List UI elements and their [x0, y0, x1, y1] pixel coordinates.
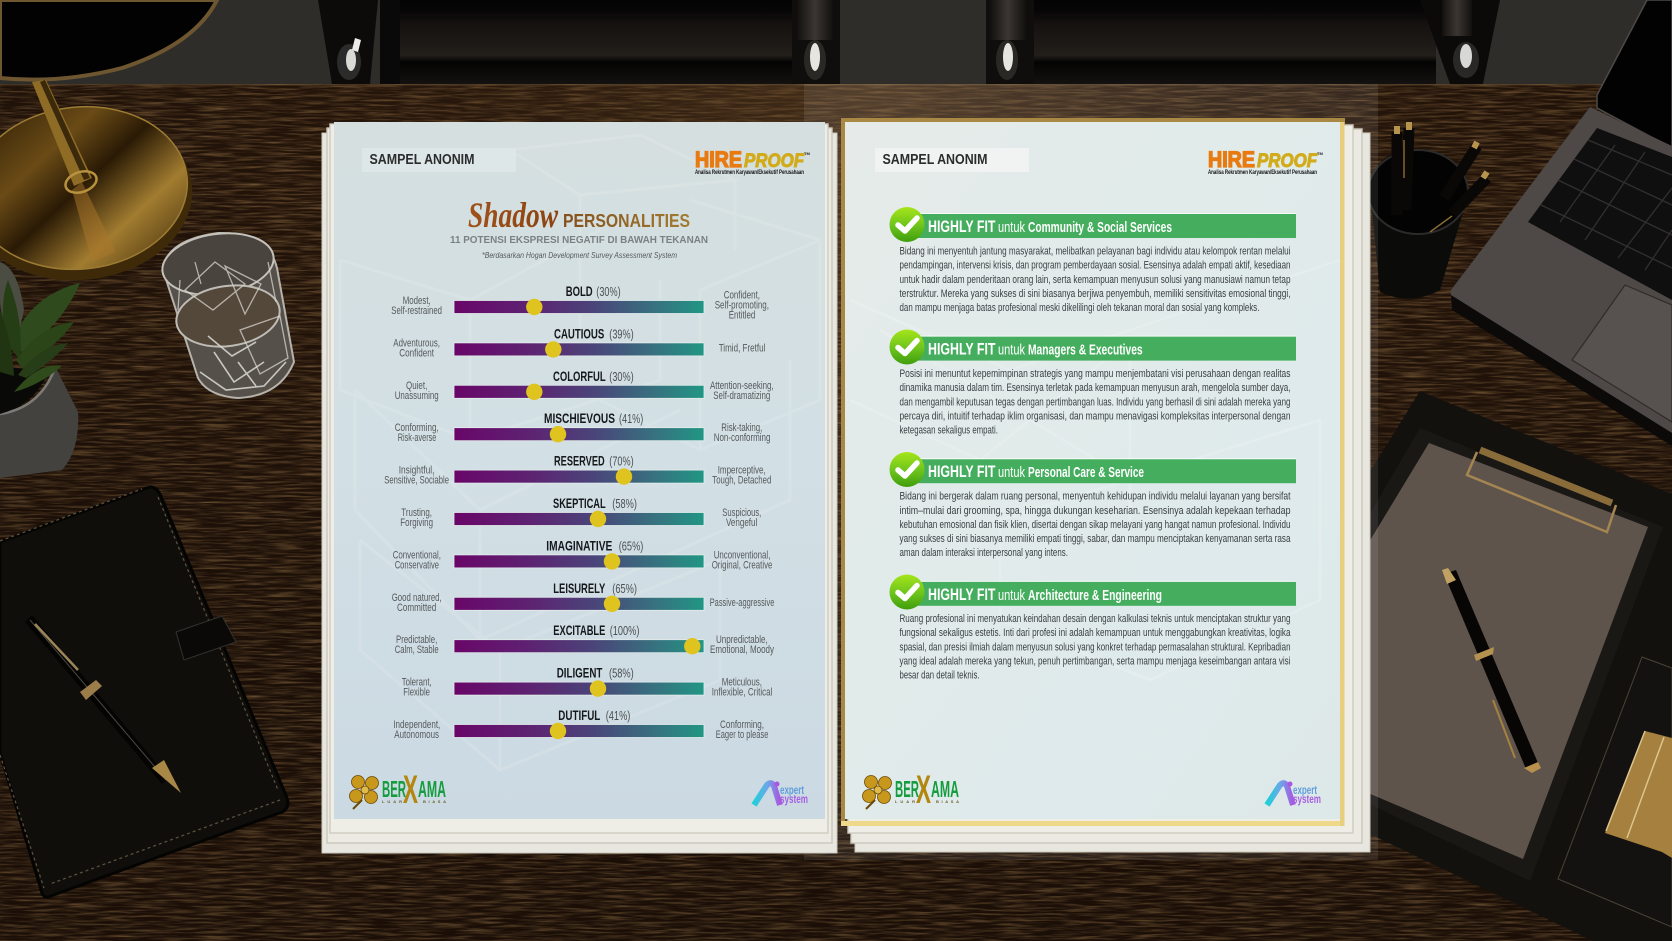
logo: berxama: X	[916, 768, 931, 812]
body text: dan mampu menjaga batas profesional meski dikelilingi oleh tekanan moral dan sosial yang kompleks.	[900, 302, 1260, 314]
row: dutiful	[393, 707, 768, 741]
logo: hireproof: PROOF	[744, 151, 805, 172]
row: dutiful: Eager to please	[716, 729, 768, 741]
row: leisurely: Passive-aggressive	[710, 597, 774, 609]
header bar: HIGHLY FIT	[928, 463, 996, 481]
body text: spasial, dan presisi ilmiah dalam menyusun solusi yang konkret terhadap permasalahan struktural. Kepribadian	[900, 641, 1290, 653]
logo: berxama: LUAR	[382, 799, 402, 804]
page surface	[845, 122, 1340, 819]
header bar: Personal Care & Service	[1028, 464, 1144, 481]
header bar: Architecture & Engineering	[1028, 587, 1162, 604]
row: leisurely: Committed	[397, 602, 436, 614]
row: skeptical: Trusting,	[401, 507, 432, 519]
water glass	[158, 226, 294, 398]
row: mischievous: Non-conforming	[714, 432, 770, 444]
body text: untuk hadir dalam penderitaan orang lain, serta kemampuan menyusun solusi yang manusiawi namun tetap	[900, 274, 1290, 286]
row: dutiful: (41%)	[606, 709, 630, 723]
page: highly fit results	[841, 118, 1370, 852]
row: bold: Confident,	[724, 290, 760, 302]
row: skeptical	[400, 495, 761, 529]
row: excitable	[395, 622, 774, 656]
row: reserved: RESERVED	[554, 453, 605, 469]
logo: ai expert system: expert	[1293, 783, 1317, 797]
row: bold: Self-restrained	[391, 305, 442, 317]
section: managers and executives	[890, 330, 1296, 436]
row: diligent: Inflexible, Critical	[712, 687, 772, 699]
row: imaginative: Conventional,	[393, 549, 441, 561]
logo: hireproof: HIRE	[695, 147, 742, 172]
black leather notebook with pen	[0, 487, 288, 897]
row: bold: Modest,	[403, 295, 431, 307]
row: mischievous: (41%)	[619, 412, 643, 426]
header bar	[890, 452, 1296, 487]
logo: ai expert system	[1267, 782, 1321, 806]
clipboard clip	[1467, 450, 1616, 532]
subtitle: 11 POTENSI EKSPRESI NEGATIF DI BAWAH TEKANAN	[450, 234, 708, 246]
logo: ai expert system: system	[1293, 792, 1321, 806]
row: leisurely	[392, 580, 774, 614]
logo: hireproof: HIRE	[1208, 147, 1255, 172]
row: bold: Entitled	[729, 310, 755, 322]
row: cautious: Adventurous,	[393, 337, 440, 349]
header bar: Managers & Executives	[1028, 342, 1143, 359]
logo: berxama: BER	[895, 776, 919, 802]
row: dutiful: Independent,	[393, 719, 440, 731]
logo: berxama: LUAR	[895, 799, 915, 804]
row: diligent: Tolerant,	[402, 677, 432, 689]
row: skeptical: SKEPTICAL	[553, 495, 606, 511]
laptop screen	[1597, 0, 1672, 148]
row: reserved: Sensitive, Sociable	[384, 475, 449, 487]
row: skeptical: Suspicious,	[722, 507, 761, 519]
icon: clover	[862, 776, 892, 809]
body text	[900, 246, 1290, 314]
body text: terstruktur. Mereka yang sukses di sini biasanya berjiwa penyembuh, memiliki sensitivitas emosional tinggi,	[900, 288, 1290, 300]
section: personal care and service	[890, 452, 1296, 559]
body text: Posisi ini menuntut kepemimpinan strategis yang mampu menjembatani visi perusahaan dengan realitas	[900, 368, 1291, 380]
body text: kebutuhan emosional dan fisik klien, disertai dengan sikap melayani yang hangat namun profesional. Individu	[900, 519, 1290, 531]
header bar: untuk	[998, 464, 1025, 481]
laptop	[1451, 0, 1672, 446]
row: imaginative: Conservative	[395, 559, 439, 571]
lamp with brass base	[0, 0, 217, 291]
row: dutiful: DUTIFUL	[558, 707, 601, 723]
row: excitable: EXCITABLE	[553, 622, 605, 638]
row: excitable: (100%)	[610, 624, 639, 638]
background: chair wall strip	[0, 0, 1672, 86]
row: cautious: CAUTIOUS	[554, 325, 604, 341]
row: reserved: Imperceptive,	[718, 465, 766, 477]
body text: Bidang ini menyentuh jantung masyarakat, melibatkan pelayanan bagi individu atau kelompok rentan melalui	[900, 246, 1290, 258]
chair arm centre right	[986, 0, 1034, 84]
row: mischievous: MISCHIEVOUS	[544, 410, 615, 426]
row: reserved	[384, 453, 771, 487]
clipboard with pen	[1340, 391, 1672, 941]
row: colorful: COLORFUL	[553, 368, 606, 384]
header bar	[890, 574, 1296, 610]
row: colorful: Self-dramatizing	[713, 390, 770, 402]
body text: fungsional sekaligus estetis. Inti dari profesi ini adalah kemampuan untuk menggabungkan kreativitas, logika	[900, 627, 1291, 639]
row: diligent: (58%)	[609, 667, 634, 681]
label: sample name	[875, 148, 1029, 172]
logo: berxama: BIASA	[423, 799, 446, 804]
row: imaginative: (65%)	[619, 539, 643, 553]
body text: yang sukses di sini biasanya memiliki empati tinggi, sabar, dan mampu menciptakan kenyamanan serta rasa	[900, 533, 1291, 545]
logo: hireproof: TM	[1317, 151, 1323, 156]
pens	[1397, 122, 1487, 232]
row: mischievous: Risk-averse	[398, 432, 436, 444]
body text: Bidang ini bergerak dalam ruang personal, menyentuh kehidupan individu melalui layanan yang bersifat	[900, 491, 1290, 503]
logo: berxama: X	[403, 768, 418, 812]
chair seat right	[1032, 0, 1436, 84]
row: cautious: Timid, Fretful	[719, 342, 765, 354]
row: excitable: Unpredictable,	[716, 634, 768, 646]
body text	[900, 613, 1291, 682]
row: imaginative: Unconventional,	[714, 549, 770, 561]
row: leisurely: (65%)	[612, 582, 637, 596]
row: colorful: Unassuming	[395, 390, 439, 402]
logo: ai expert system: system	[780, 792, 808, 806]
row: diligent: Flexible	[403, 687, 430, 699]
row: leisurely: Good natured,	[392, 592, 442, 604]
logo: hireproof: TM	[804, 151, 810, 156]
row: diligent	[402, 665, 772, 699]
row: cautious: (39%)	[609, 327, 634, 341]
row: mischievous: Conforming,	[395, 422, 439, 434]
label: sample name: SAMPEL ANONIM	[370, 152, 474, 168]
logo: berxama: AMA	[931, 776, 959, 802]
title: PERSONALITIES	[563, 210, 690, 231]
label: sample name	[362, 148, 516, 172]
row: mischievous	[395, 410, 770, 444]
folder bottom right	[1558, 657, 1672, 927]
header bar	[890, 207, 1296, 242]
row: colorful: Attention-seeking,	[710, 380, 774, 392]
title: Shadow	[468, 195, 559, 235]
logo: hireproof: PROOF	[1257, 151, 1318, 172]
row: diligent: DILIGENT	[557, 665, 603, 681]
paper stack left	[322, 124, 837, 853]
lamp rod	[32, 80, 92, 186]
section: architecture and engineering	[890, 574, 1296, 682]
body text: aman dalam interaksi interpersonal yang intens.	[900, 547, 1068, 559]
logo: berxama	[862, 768, 959, 812]
header bar: untuk	[998, 219, 1025, 236]
translucent overlay behind right page	[804, 84, 1378, 860]
row: bold: (30%)	[596, 285, 621, 299]
row: bold: Self-promoting,	[715, 300, 769, 312]
watermark: faint panes	[850, 260, 1340, 680]
body text: dinamika manusia dalam tim. Esensinya terletak pada kemampuan menyusun arah, mengelola sumber daya,	[900, 382, 1290, 394]
row: imaginative: Original, Creative	[712, 559, 772, 571]
trackpad	[1572, 285, 1672, 422]
row: mischievous: Risk-taking,	[721, 422, 762, 434]
body text: yang ideal adalah mereka yang tekun, penuh pertimbangan, serta mampu menjaga keseimbangan antara visi	[900, 655, 1290, 667]
logo: ai expert system: expert	[780, 783, 804, 797]
header bar: HIGHLY FIT	[928, 586, 996, 604]
header bar	[890, 330, 1296, 364]
clipboard paper	[1340, 443, 1648, 859]
pot	[0, 366, 78, 478]
row: colorful: Quiet,	[406, 380, 427, 392]
watermark: glass cubes	[340, 135, 820, 770]
chair arm centre left	[792, 0, 840, 84]
row: dutiful: Autonomous	[394, 729, 439, 741]
title	[468, 195, 690, 235]
row: skeptical: (58%)	[612, 497, 637, 511]
row: imaginative	[393, 537, 772, 571]
page surface	[334, 122, 825, 819]
header bar: Community & Social Services	[1028, 219, 1172, 236]
row: cautious	[393, 325, 765, 359]
clipboard pen	[1442, 568, 1541, 773]
paper stack right	[848, 125, 1370, 852]
header bar: HIGHLY FIT	[928, 341, 996, 359]
body text	[900, 368, 1291, 436]
row: reserved: (70%)	[609, 455, 634, 469]
page: shadow personalities	[322, 122, 837, 853]
row: colorful: (30%)	[609, 370, 634, 384]
logo: hireproof: Analisa Rekrutmen Karyawan/Eksekutif Perusahaan	[695, 170, 804, 176]
body text: dan mengambil keputusan tegas dengan pertimbangan luas. Individu yang berhasil di sini adalah mereka yang	[900, 396, 1290, 408]
header bar: untuk	[998, 342, 1025, 359]
row: cautious: Confident	[399, 347, 434, 359]
logo: berxama	[350, 768, 446, 812]
header bar: HIGHLY FIT	[928, 218, 996, 236]
row: bold	[391, 283, 769, 322]
row: diligent: Meticulous,	[722, 677, 762, 689]
row: colorful	[395, 368, 774, 402]
row: excitable: Predictable,	[396, 634, 437, 646]
notebook pen	[25, 615, 181, 793]
section: community and social services	[890, 207, 1296, 314]
lamp base	[0, 96, 201, 291]
chair arm far left	[318, 0, 400, 84]
laptop base	[1451, 107, 1672, 433]
potted plant	[0, 262, 80, 478]
body text: pendampingan, intervensi krisis, dan program pemberdayaan sosial. Esensinya adalah empati aktif, kesediaan	[900, 260, 1290, 272]
row: skeptical: Vengeful	[726, 517, 757, 529]
body text: Ruang profesional ini menyatukan keindahan desain dengan kalkulasi teknis untuk menciptakan struktur yang	[900, 613, 1290, 625]
body text: intim–mulai dari grooming, spa, hingga dukungan keseharian. Esensinya adalah kepekaan terhadap	[900, 505, 1290, 517]
row: skeptical: Forgiving	[400, 517, 433, 529]
row: reserved: Tough, Detached	[712, 475, 771, 487]
row: leisurely: LEISURELY	[553, 580, 606, 596]
logo: berxama: AMA	[418, 776, 446, 802]
keyboard	[1528, 128, 1672, 300]
leaves	[10, 283, 80, 352]
logo: berxama: BER	[382, 776, 406, 802]
footnote: *Berdasarkan Hogan Development Survey Assessment System	[482, 251, 677, 260]
logo: hireproof	[1208, 147, 1323, 176]
logo: ai expert system	[754, 782, 808, 806]
row: imaginative: IMAGINATIVE	[546, 537, 612, 553]
label: sample name: SAMPEL ANONIM	[882, 152, 988, 168]
gold frame	[841, 118, 1345, 826]
logo: berxama: BIASA	[936, 799, 959, 804]
body text	[900, 491, 1291, 559]
pen cup with pens	[1368, 122, 1487, 299]
logo: hireproof	[695, 147, 810, 176]
row: dutiful: Conforming,	[720, 719, 764, 731]
row: excitable: Calm, Stable	[395, 644, 439, 656]
header bar: untuk	[998, 587, 1025, 604]
row: excitable: Emotional, Moody	[710, 644, 774, 656]
row: bold: BOLD	[566, 283, 593, 299]
notebook strap	[176, 616, 236, 660]
chart: shadow personality sliders	[384, 283, 774, 741]
body text: percaya diri, intuitif terhadap iklim organisasi, dan mampu menavigasi kompleksitas interpersonal dengan	[900, 410, 1290, 422]
body text: ketegasan sekaligus empati.	[900, 424, 998, 436]
logo: hireproof: Analisa Rekrutmen Karyawan/Eksekutif Perusahaan	[1208, 170, 1317, 176]
body text: besar dan detail teknis.	[900, 670, 980, 682]
chair arm far right	[1420, 0, 1500, 84]
chair seat left	[398, 0, 792, 84]
row: reserved: Insightful,	[399, 465, 434, 477]
icon: clover	[350, 776, 378, 809]
lamp shade	[0, 0, 217, 80]
